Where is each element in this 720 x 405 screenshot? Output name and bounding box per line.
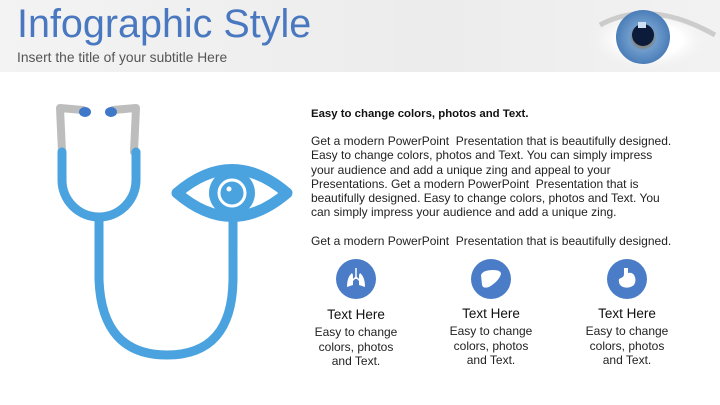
column 3: Easy to change colors, photos and Text.: [586, 324, 668, 367]
column 2: Text Here: [462, 306, 520, 321]
paragraph 2: Get a modern PowerPoint Presentation that is beautifully designed.: [311, 234, 671, 248]
eye photo: [599, 10, 716, 64]
paragraph: Get a modern PowerPoint Presentation that is beautifully designed. Easy to change colors, photos and Text. You can simply impress your audience and add a unique zing and appeal to your Presentations. Get a modern PowerPoint Presentation that is beautifully designed. Easy to change colors, photos and Text. You can simply impress your audience and add a unique zing.: [311, 134, 671, 219]
header band: [0, 0, 720, 72]
icon: lungs: [336, 259, 376, 299]
subtitle: Insert the title of your subtitle Here: [17, 50, 227, 65]
column 1: Text Here: [327, 307, 385, 322]
column 3: Text Here: [598, 306, 656, 321]
icon: stomach: [607, 259, 647, 299]
stethoscope with eye icon: [56, 104, 292, 360]
icon: liver: [471, 259, 511, 299]
column 1: Easy to change colors, photos and Text.: [315, 325, 397, 368]
column 2: Easy to change colors, photos and Text.: [450, 324, 532, 367]
title: Infographic Style: [17, 2, 311, 46]
heading: Easy to change colors, photos and Text.: [311, 108, 529, 120]
